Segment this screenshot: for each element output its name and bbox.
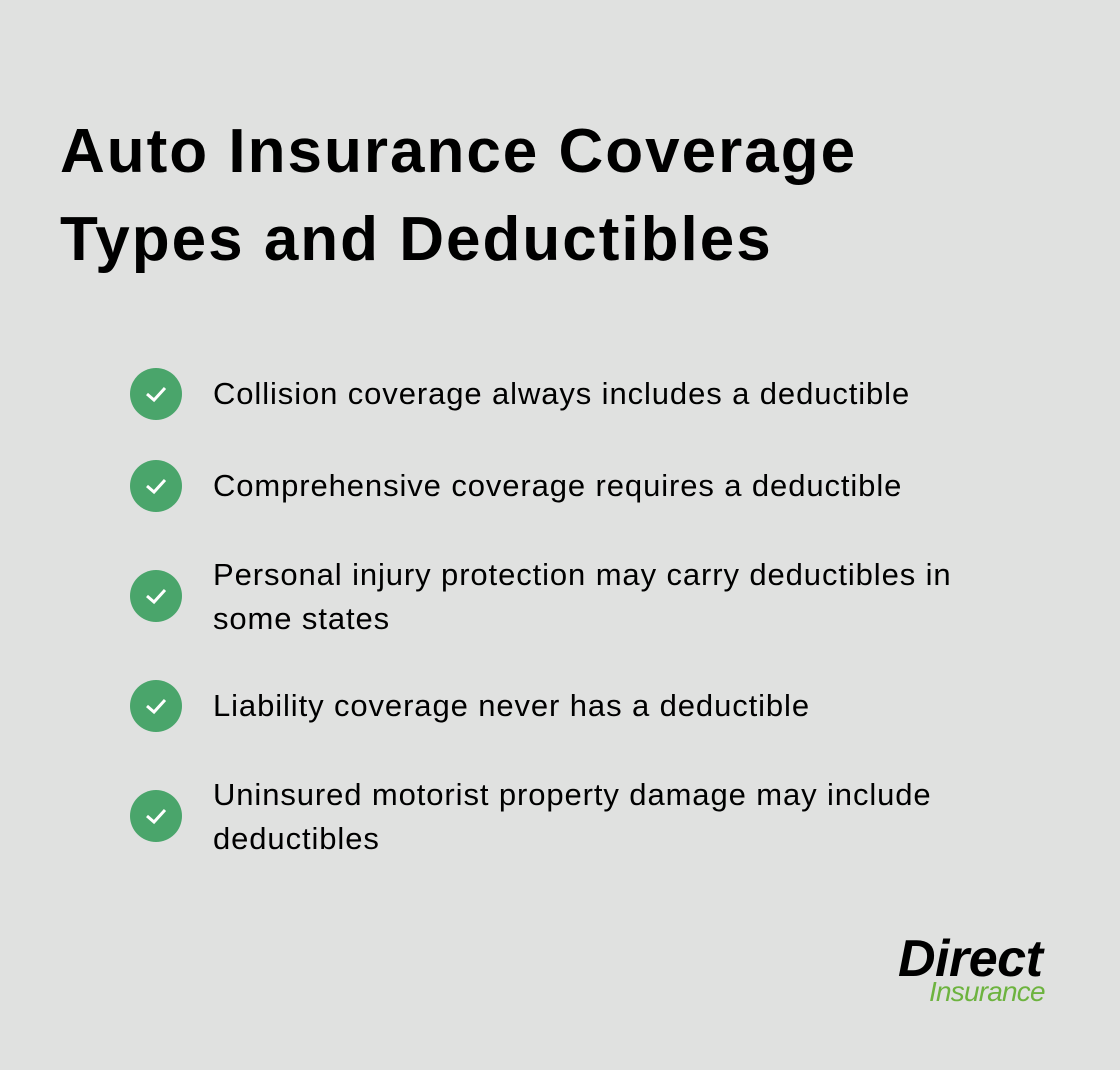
item 1: Collision coverage always includes a deductible	[213, 376, 910, 411]
item 3: Personal injury protection may carry deductibles in some states	[213, 557, 952, 636]
item 4: Liability coverage never has a deductible	[213, 688, 810, 723]
title: Types and Deductibles	[60, 205, 773, 274]
logo: Direct	[898, 930, 1042, 988]
item 2	[130, 460, 902, 512]
title: Auto Insurance Coverage	[60, 117, 857, 186]
item 4	[130, 680, 810, 732]
item 2: Comprehensive coverage requires a deductible	[213, 468, 902, 503]
logo: Insurance	[929, 976, 1045, 1007]
title	[60, 117, 857, 274]
item 1	[130, 368, 910, 420]
item 5: Uninsured motorist property damage may include deductibles	[213, 777, 932, 856]
